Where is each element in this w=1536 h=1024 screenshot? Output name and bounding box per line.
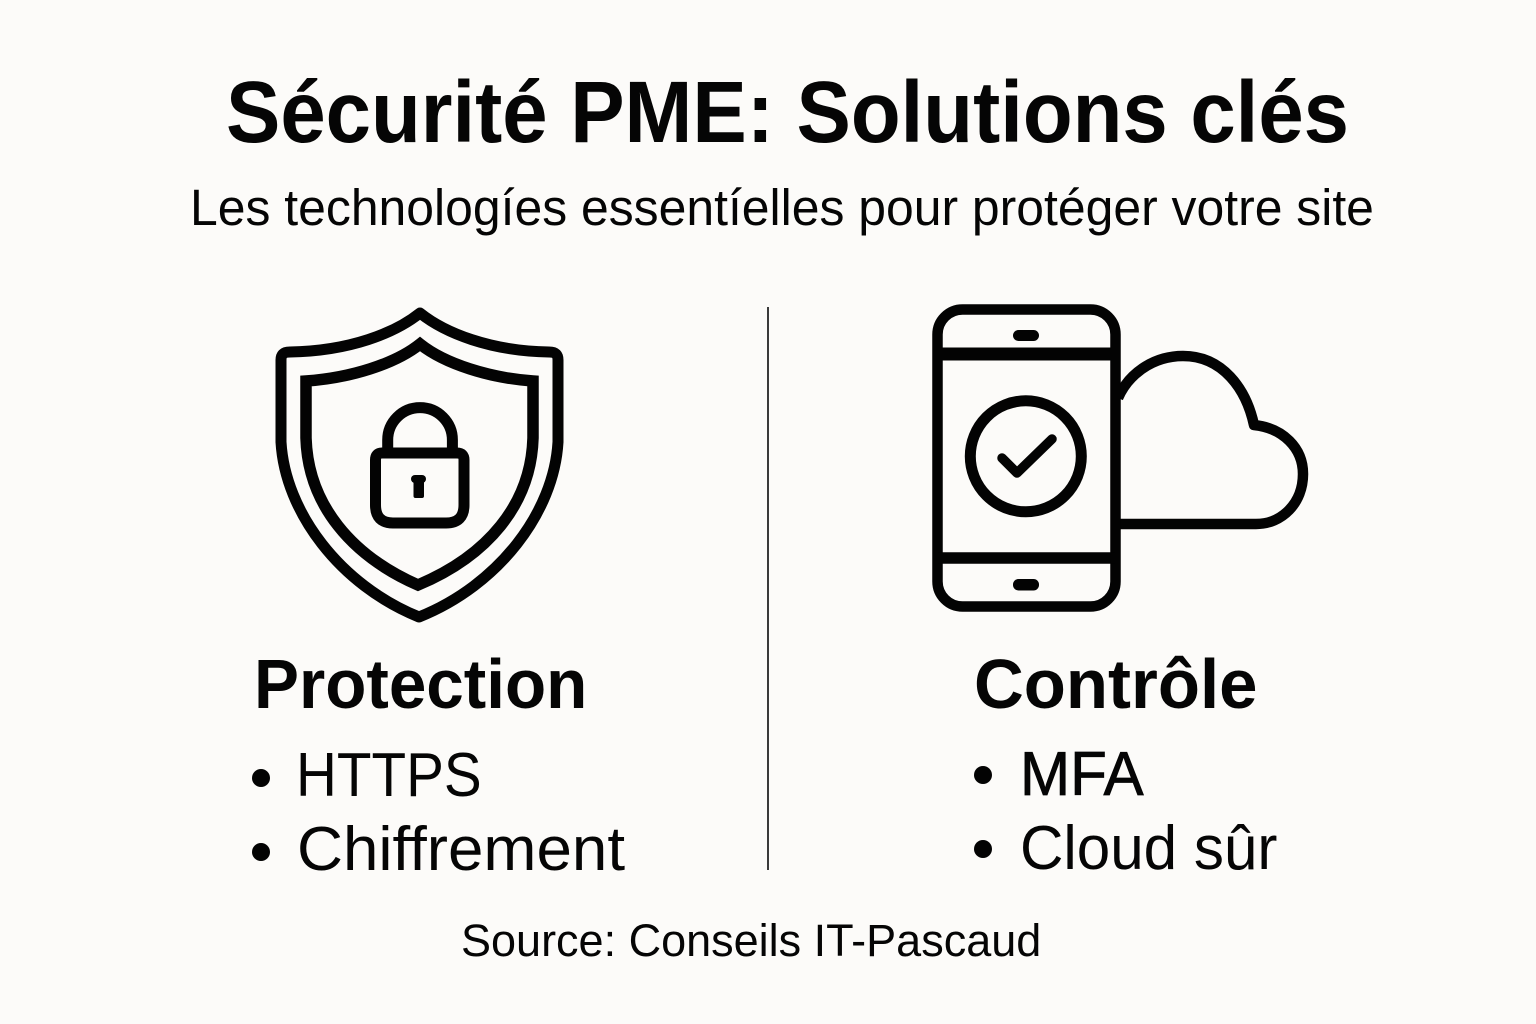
top bar (938, 348, 1115, 360)
check circle (970, 401, 1081, 512)
title: Sécurité PME: Solutions clés (226, 64, 1349, 161)
padlock shackle (388, 408, 452, 453)
padlock body (376, 453, 464, 523)
phone body (938, 310, 1116, 606)
inner shield (306, 344, 533, 585)
Chiffrement: Chiffrement (297, 814, 625, 884)
bullet 2 (252, 843, 270, 861)
check mark (1002, 439, 1052, 473)
bullet 1 (974, 766, 992, 784)
MFA: MFA (1020, 740, 1144, 809)
HTTPS: HTTPS (296, 740, 482, 810)
source: Source: Conseils IT-Pascaud (461, 915, 1041, 966)
subtitle: Les technologíes essentíelles pour protéger votre site (190, 179, 1374, 236)
list: controle (974, 740, 1277, 883)
bullet 2 (974, 840, 992, 858)
outer shield (281, 313, 558, 617)
bottom bar (938, 552, 1115, 564)
speaker top (1013, 330, 1039, 341)
cloud (1118, 356, 1303, 524)
heading: Protection: Protection (254, 645, 587, 723)
list: protection (252, 740, 625, 884)
bullet 1 (252, 769, 270, 787)
keyhole (411, 475, 426, 498)
heading: Contrôle: Contrôle (974, 645, 1257, 723)
divider (767, 307, 769, 870)
Cloud sûr: Cloud sûr (1020, 814, 1277, 883)
speaker bottom (1013, 579, 1039, 590)
